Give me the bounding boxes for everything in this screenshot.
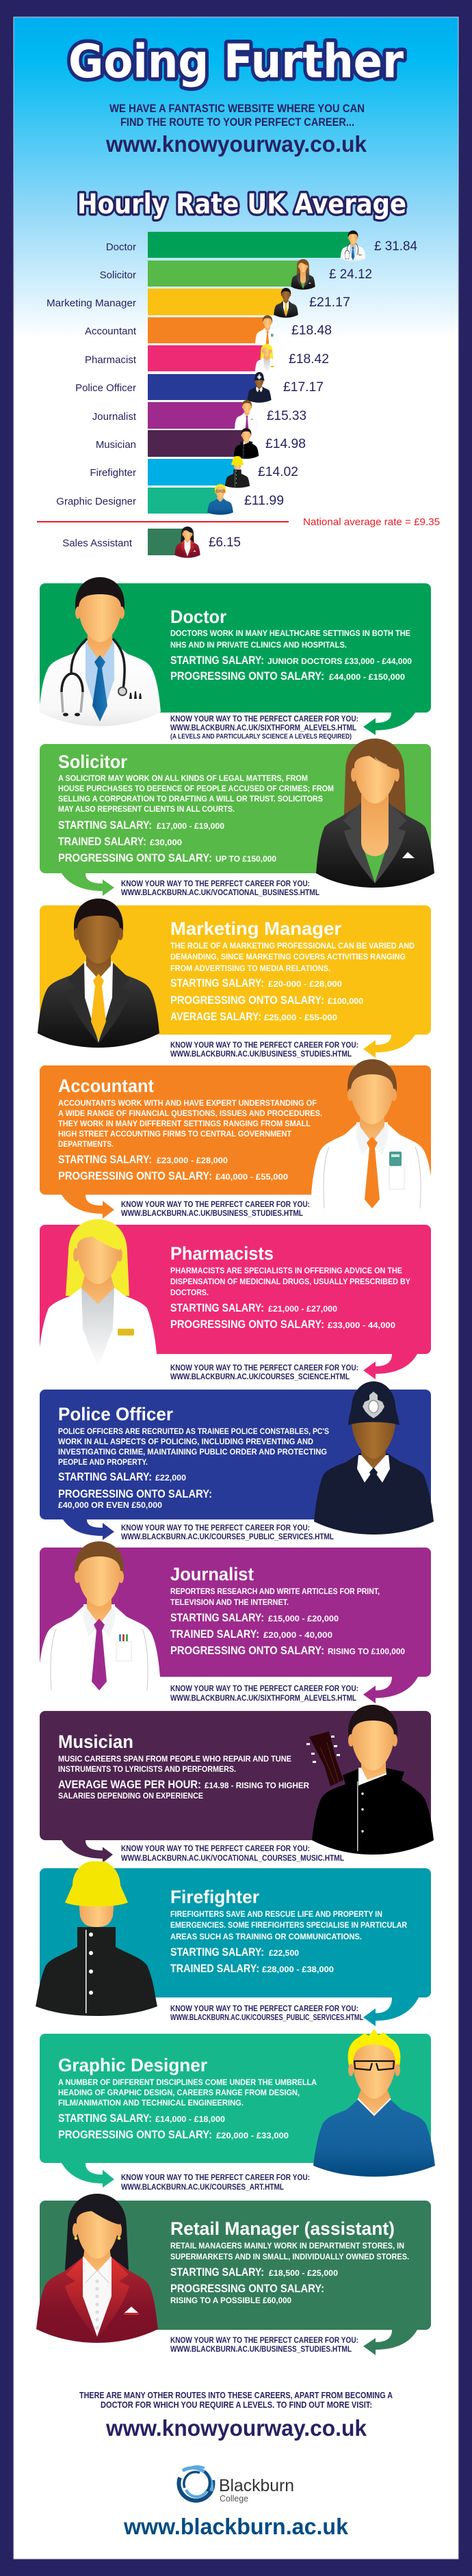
panel: police officer xyxy=(40,1381,434,1541)
bar chart: hourly rate xyxy=(37,230,440,558)
salaries: JUNIOR DOCTORS £33,000 - £44,000 xyxy=(267,658,412,666)
description: POLICE OFFICERS ARE RECRUITED AS TRAINEE POLICE CONSTABLES, PC'S xyxy=(58,1428,329,1436)
salaries: £20,000 - 40,000 xyxy=(263,1632,332,1640)
description: FROM ADVERTISING TO MEDIA RELATIONS. xyxy=(170,965,330,973)
salaries xyxy=(170,2266,338,2305)
heading: Marketing Manager xyxy=(170,918,341,939)
career link: WWW.BLACKBURN.AC.UK/VOCATIONAL_COURSES_MUSIC.HTML xyxy=(121,1855,344,1863)
salaries: £18,500 - £25,000 xyxy=(269,2270,338,2278)
description: AREAS SUCH AS TRAINING OR COMMUNICATIONS. xyxy=(170,1933,362,1941)
salaries: AVERAGE SALARY: xyxy=(170,1011,261,1023)
heading: Firefighter xyxy=(170,1887,259,1907)
figure: graphic designer xyxy=(313,2029,435,2177)
card background xyxy=(40,744,431,873)
salaries: £100,000 xyxy=(328,998,363,1006)
description: HOUSE PURCHASES TO DEFENCE OF PEOPLE ACCUSED OF CRIMES; FROM xyxy=(58,785,334,793)
heading: Accountant xyxy=(58,1076,154,1096)
figure: journalist xyxy=(38,1541,160,1690)
salaries: £15,000 - £20,000 xyxy=(268,1615,339,1623)
heading: Doctor xyxy=(170,607,226,627)
description xyxy=(170,942,415,973)
card background xyxy=(40,905,431,1035)
arrow xyxy=(363,1677,418,1703)
salaries: STARTING SALARY: xyxy=(170,1612,264,1624)
bar values: £11.99 xyxy=(244,494,284,508)
salaries: TRAINED SALARY: xyxy=(170,1628,259,1641)
description: THE ROLE OF A MARKETING PROFESSIONAL CAN BE VARIED AND xyxy=(170,942,415,951)
career link xyxy=(170,1041,358,1059)
salaries: PROGRESSING ONTO SALARY: xyxy=(170,2283,324,2295)
career link: WWW.BLACKBURN.AC.UK/COURSES_PUBLIC_SERVICES.HTML xyxy=(170,2014,363,2022)
bar values: £18.42 xyxy=(289,352,329,367)
description xyxy=(58,1100,322,1149)
sky gradient header background xyxy=(14,18,458,339)
heading: Retail Manager (assistant) xyxy=(170,2218,395,2239)
description xyxy=(170,630,410,650)
salaries: AVERAGE WAGE PER HOUR: xyxy=(58,1779,201,1791)
salaries: £40,000 - £55,000 xyxy=(215,1173,288,1182)
description: PHARMACISTS ARE SPECIALISTS IN OFFERING ADVICE ON THE xyxy=(170,1267,402,1275)
footer note: DOCTOR FOR WHICH YOU REQUIRE A LEVELS. TO FIND OUT MORE VISIT: xyxy=(101,2400,372,2410)
card background xyxy=(40,1868,431,1997)
description: WORK IN ALL ASPECTS OF POLICING, INCLUDING PREVENTING AND xyxy=(58,1438,313,1446)
career link: KNOW YOUR WAY TO THE PERFECT CAREER FOR YOU: xyxy=(170,2005,358,2013)
salaries: £23,000 - £28,000 xyxy=(157,1157,228,1165)
career link xyxy=(170,1364,358,1381)
career link: WWW.BLACKBURN.AC.UK/COURSES_SCIENCE.HTML xyxy=(170,1373,350,1381)
description xyxy=(170,1588,380,1607)
arrow xyxy=(363,1354,417,1379)
logo wordmark: Blackburn xyxy=(219,2476,294,2495)
panel: firefighter xyxy=(36,1861,431,2026)
card background xyxy=(40,1065,431,1195)
arrow xyxy=(62,873,114,896)
college website: www.blackburn.ac.uk xyxy=(123,2514,349,2539)
bar labels: Musician xyxy=(96,439,136,451)
salaries: RISING TO £100,000 xyxy=(328,1648,405,1656)
panel: solicitor xyxy=(40,739,434,897)
footer note: THERE ARE MANY OTHER ROUTES INTO THESE CAREERS, APART FROM BECOMING A xyxy=(79,2390,393,2400)
career link: WWW.BLACKBURN.AC.UK/BUSINESS_STUDIES.HTML xyxy=(170,2346,352,2354)
bar values: £ 31.84 xyxy=(374,239,417,254)
panel: retail manager xyxy=(36,2194,431,2355)
career link: KNOW YOUR WAY TO THE PERFECT CAREER FOR YOU: xyxy=(170,2337,358,2345)
website link: www.knowyourway.co.uk xyxy=(105,131,367,157)
career link: WWW.BLACKBURN.AC.UK/SIXTHFORM_ALEVELS.HTML xyxy=(170,1695,356,1703)
career link: KNOW YOUR WAY TO THE PERFECT CAREER FOR YOU: xyxy=(121,2174,310,2182)
logo: Blackburn College xyxy=(179,2467,294,2504)
description: HIGH STREET ACCOUNTING FIRMS TO CENTRAL GOVERNMENT xyxy=(58,1130,291,1139)
card background xyxy=(40,1225,431,1354)
description: DEMANDING, SINCE MARKETING COVERS ACTIVITIES RANGING xyxy=(170,953,406,961)
bar labels: Solicitor xyxy=(100,269,136,281)
description: HEADING OF GRAPHIC DESIGN, CAREERS RANGE FROM DESIGN, xyxy=(58,2089,300,2097)
description xyxy=(58,775,334,814)
description: DEPARTMENTS. xyxy=(58,1141,114,1149)
bar values: £18.48 xyxy=(291,323,332,338)
salaries: STARTING SALARY: xyxy=(170,654,264,667)
salaries xyxy=(170,977,363,1023)
salaries: PROGRESSING ONTO SALARY: xyxy=(170,670,324,682)
career link: KNOW YOUR WAY TO THE PERFECT CAREER FOR YOU: xyxy=(121,1201,310,1209)
salaries xyxy=(170,1946,334,1975)
bars xyxy=(148,232,353,555)
bar labels: Accountant xyxy=(85,326,137,337)
salaries: PROGRESSING ONTO SALARY: xyxy=(58,2129,212,2141)
career link: KNOW YOUR WAY TO THE PERFECT CAREER FOR YOU: xyxy=(170,1041,358,1050)
figure: firefighter xyxy=(36,1861,157,2016)
career link xyxy=(121,1524,334,1541)
salaries: £20,000 - £33,000 xyxy=(216,2132,289,2140)
career link: WWW.BLACKBURN.AC.UK/BUSINESS_STUDIES.HTML xyxy=(121,1210,303,1218)
salaries: PROGRESSING ONTO SALARY: xyxy=(58,1170,212,1182)
career link: KNOW YOUR WAY TO THE PERFECT CAREER FOR YOU: xyxy=(121,880,310,888)
arrow xyxy=(62,2163,114,2188)
salaries: STARTING SALARY: xyxy=(170,1946,264,1958)
intro text xyxy=(109,102,365,129)
description: INVESTIGATING CRIME, MAINTAINING PUBLIC ORDER AND PROTECTING xyxy=(58,1448,327,1457)
salaries: STARTING SALARY: xyxy=(58,1471,152,1483)
description: DOCTORS. xyxy=(170,1289,209,1297)
career link: KNOW YOUR WAY TO THE PERFECT CAREER FOR YOU: xyxy=(121,1845,310,1853)
bar values: £14.98 xyxy=(265,437,306,451)
description: SUPERMARKETS AND IN SMALL, INDIVIDUALLY OWNED STORES. xyxy=(170,2253,409,2261)
description: A WIDE RANGE OF FINANCIAL QUESTIONS, ISSUES AND PROCEDURES. xyxy=(58,1110,322,1118)
panel: journalist xyxy=(38,1541,431,1703)
bar values xyxy=(209,239,417,550)
panel: marketing manager xyxy=(38,899,431,1059)
figure: doctor xyxy=(39,577,161,726)
salaries: £40,000 OR EVEN £50,000 xyxy=(58,1502,162,1510)
bar labels: Journalist xyxy=(92,411,137,423)
career link: WWW.BLACKBURN.AC.UK/COURSES_PUBLIC_SERVICES.HTML xyxy=(121,1533,334,1541)
description: A NUMBER OF DIFFERENT DISCIPLINES COME UNDER THE UMBRELLA xyxy=(58,2079,317,2087)
figure: pharmacist xyxy=(39,1219,157,1368)
description xyxy=(58,1755,291,1774)
salaries: PROGRESSING ONTO SALARY: xyxy=(58,852,212,864)
description: EMERGENCIES. SOME FIREFIGHTERS SPECIALISE IN PARTICULAR xyxy=(170,1922,408,1930)
description xyxy=(58,2079,317,2108)
salaries xyxy=(58,1471,212,1510)
bar labels: Police Officer xyxy=(75,382,136,394)
salaries: PROGRESSING ONTO SALARY: xyxy=(58,1488,212,1500)
salaries xyxy=(170,1612,405,1657)
figure: marketing manager xyxy=(38,899,159,1048)
arrow xyxy=(63,1519,114,1540)
salaries xyxy=(170,654,412,682)
bar values: £15.33 xyxy=(267,409,306,423)
intro text: WE HAVE A FANTASTIC WEBSITE WHERE YOU CAN xyxy=(109,102,365,115)
card background xyxy=(40,2034,431,2163)
description: ACCOUNTANTS WORK WITH AND HAVE EXPERT UNDERSTANDING OF xyxy=(58,1100,317,1108)
card background xyxy=(40,1548,431,1677)
salaries: £14.98 - RISING TO HIGHER xyxy=(205,1782,310,1790)
card background xyxy=(40,583,431,713)
bar values: £ 24.12 xyxy=(329,267,372,282)
salaries: TRAINED SALARY: xyxy=(58,836,146,848)
card background xyxy=(40,1711,431,1840)
heading: Musician xyxy=(58,1731,133,1752)
description: INSTRUMENTS TO LYRICISTS AND PERFORMERS. xyxy=(58,1766,236,1774)
salaries: £21,000 - £27,000 xyxy=(268,1305,337,1314)
salaries: UP TO £150,000 xyxy=(215,855,276,864)
salaries: £22,500 xyxy=(269,1950,299,1958)
arrow xyxy=(62,1195,114,1219)
salaries: £17,000 - £19,000 xyxy=(157,823,224,831)
salaries: £25,000 - £55-000 xyxy=(264,1014,337,1022)
website link: www.knowyourway.co.uk xyxy=(105,2415,367,2441)
description xyxy=(170,1911,408,1941)
career link: KNOW YOUR WAY TO THE PERFECT CAREER FOR YOU: xyxy=(170,715,358,723)
description xyxy=(170,1267,410,1297)
panel: musician xyxy=(40,1705,434,1863)
career link xyxy=(170,2005,363,2022)
intro text: FIND THE ROUTE TO YOUR PERFECT CAREER... xyxy=(120,116,354,129)
description: REPORTERS RESEARCH AND WRITE ARTICLES FOR PRINT, xyxy=(170,1588,380,1596)
description: MAY ALSO REPRESENT CLIENTS IN ALL COURTS. xyxy=(58,806,235,814)
description: DISPENSATION OF MEDICINAL DRUGS, USUALLY PRESCRIBED BY xyxy=(170,1278,410,1286)
figure: police officer xyxy=(314,1381,434,1535)
salaries: PROGRESSING ONTO SALARY: xyxy=(170,994,324,1007)
bar labels: Pharmacist xyxy=(85,354,137,366)
career link: WWW.BLACKBURN.AC.UK/BUSINESS_STUDIES.HTML xyxy=(170,1050,352,1059)
description: NHS AND IN PRIVATE CLINICS AND HOSPITALS. xyxy=(170,641,347,650)
card background xyxy=(40,1390,431,1519)
salaries: £44,000 - £150,000 xyxy=(329,674,405,682)
panel: pharmacist xyxy=(39,1219,431,1381)
career link xyxy=(121,1201,310,1218)
bar values: £21.17 xyxy=(309,295,350,310)
salaries: STARTING SALARY: xyxy=(170,977,264,990)
description xyxy=(58,1428,329,1467)
career link xyxy=(170,2337,358,2354)
career link: WWW.BLACKBURN.AC.UK/COURSES_ART.HTML xyxy=(121,2183,284,2192)
salaries: £20-000 - £28,000 xyxy=(268,981,342,989)
career link: KNOW YOUR WAY TO THE PERFECT CAREER FOR YOU: xyxy=(170,1685,358,1693)
chart title: Hourly Rate UK Average xyxy=(77,189,406,220)
salaries: STARTING SALARY: xyxy=(170,2266,264,2279)
salaries: £30,000 xyxy=(150,839,182,847)
arrow xyxy=(363,1997,419,2026)
figure: solicitor xyxy=(316,739,434,888)
description xyxy=(170,2242,409,2261)
description: TELEVISION AND THE INTERNET. xyxy=(170,1599,289,1607)
panel: graphic designer xyxy=(40,2029,435,2192)
salaries: STARTING SALARY: xyxy=(170,1302,264,1314)
salaries: PROGRESSING ONTO SALARY: xyxy=(170,1318,324,1331)
career link xyxy=(121,1845,344,1863)
salaries: STARTING SALARY: xyxy=(58,2112,152,2125)
bar labels: Marketing Manager xyxy=(47,297,136,309)
description: MUSIC CAREERS SPAN FROM PEOPLE WHO REPAIR AND TUNE xyxy=(58,1755,291,1764)
salaries: £28,000 - £38,000 xyxy=(262,1966,334,1974)
career link xyxy=(170,1685,358,1703)
icon: guitar headstock xyxy=(306,1731,343,1786)
description: THEY WORK IN MANY DIFFERENT SETTINGS RANGING FROM SMALL xyxy=(58,1120,311,1128)
salaries xyxy=(58,1779,310,1801)
salaries: £14,000 - £18,000 xyxy=(155,2116,225,2124)
figure: retail manager xyxy=(36,2194,158,2343)
heading: Journalist xyxy=(170,1564,254,1584)
bar labels: Sales Assistant xyxy=(62,537,133,549)
salaries xyxy=(58,1154,288,1182)
career link xyxy=(121,2174,310,2192)
salaries xyxy=(58,2112,289,2141)
career link xyxy=(121,880,319,897)
description: FIREFIGHTERS SAVE AND RESCUE LIFE AND PROPERTY IN xyxy=(170,1911,382,1919)
heading: Graphic Designer xyxy=(58,2055,207,2075)
career link: WWW.BLACKBURN.AC.UK/VOCATIONAL_BUSINESS.HTML xyxy=(121,889,319,897)
salaries xyxy=(58,819,276,864)
logo subtitle: College xyxy=(220,2493,248,2504)
bar values: £17.17 xyxy=(283,380,324,395)
career link: KNOW YOUR WAY TO THE PERFECT CAREER FOR YOU: xyxy=(121,1524,310,1532)
career link: WWW.BLACKBURN.AC.UK/SIXTHFORM_ALEVELS.HTML xyxy=(170,724,356,732)
figure: musician xyxy=(312,1705,434,1855)
career link xyxy=(170,715,358,741)
bar labels: Firefighter xyxy=(90,467,136,479)
description: FILM/ANIMATION AND TECHNICAL ENGINEERING. xyxy=(58,2099,244,2108)
bar labels xyxy=(47,241,137,549)
card background xyxy=(40,2201,431,2330)
heading: Police Officer xyxy=(58,1404,173,1424)
bar labels: Doctor xyxy=(106,241,136,253)
salaries: STARTING SALARY: xyxy=(58,1154,152,1166)
title: Going Further xyxy=(68,35,404,89)
description: PEOPLE AND PROPERTY. xyxy=(58,1459,148,1467)
salaries: PROGRESSING ONTO SALARY: xyxy=(170,1645,324,1657)
salaries: STARTING SALARY: xyxy=(58,819,152,832)
salaries: £22,000 xyxy=(155,1474,186,1483)
career link: (A LEVELS AND PARTICULARLY SCIENCE A LEVELS REQUIRED) xyxy=(170,733,352,741)
arrow xyxy=(62,1840,113,1863)
salaries: RISING TO A POSSIBLE £60,000 xyxy=(170,2297,291,2305)
description: DOCTORS WORK IN MANY HEALTHCARE SETTINGS IN BOTH THE xyxy=(170,630,410,638)
bar values: £6.15 xyxy=(209,535,241,550)
figure: accountant xyxy=(311,1059,433,1208)
heading: Pharmacists xyxy=(170,1243,274,1264)
career link: KNOW YOUR WAY TO THE PERFECT CAREER FOR YOU: xyxy=(170,1364,358,1372)
bar labels: Graphic Designer xyxy=(56,496,136,507)
footer note xyxy=(79,2390,393,2410)
icon: swirl xyxy=(179,2467,213,2501)
heading: Solicitor xyxy=(58,752,127,772)
panel: doctor xyxy=(39,577,431,741)
description: A SOLICITOR MAY WORK ON ALL KINDS OF LEGAL MATTERS, FROM xyxy=(58,775,308,783)
national average line xyxy=(37,521,289,522)
salaries: TRAINED SALARY: xyxy=(170,1963,259,1975)
description: SELLING A CORPORATION TO DRAFTING A WILL OR TRUST. SOLICITORS xyxy=(58,795,323,804)
bar values: £14.02 xyxy=(258,465,298,479)
arrow xyxy=(363,1035,415,1058)
salaries: SALARIES DEPENDING ON EXPERIENCE xyxy=(58,1792,203,1801)
salaries xyxy=(170,1302,395,1331)
panel: accountant xyxy=(40,1059,433,1219)
national average label: National average rate = £9.35 xyxy=(303,516,440,528)
arrow xyxy=(363,2330,417,2355)
bar figure icons xyxy=(174,230,365,558)
description: RETAIL MANAGERS MAINLY WORK IN DEPARTMENT STORES, IN xyxy=(170,2242,404,2250)
salaries: £33,000 - 44,000 xyxy=(328,1322,395,1330)
arrow xyxy=(363,713,415,735)
